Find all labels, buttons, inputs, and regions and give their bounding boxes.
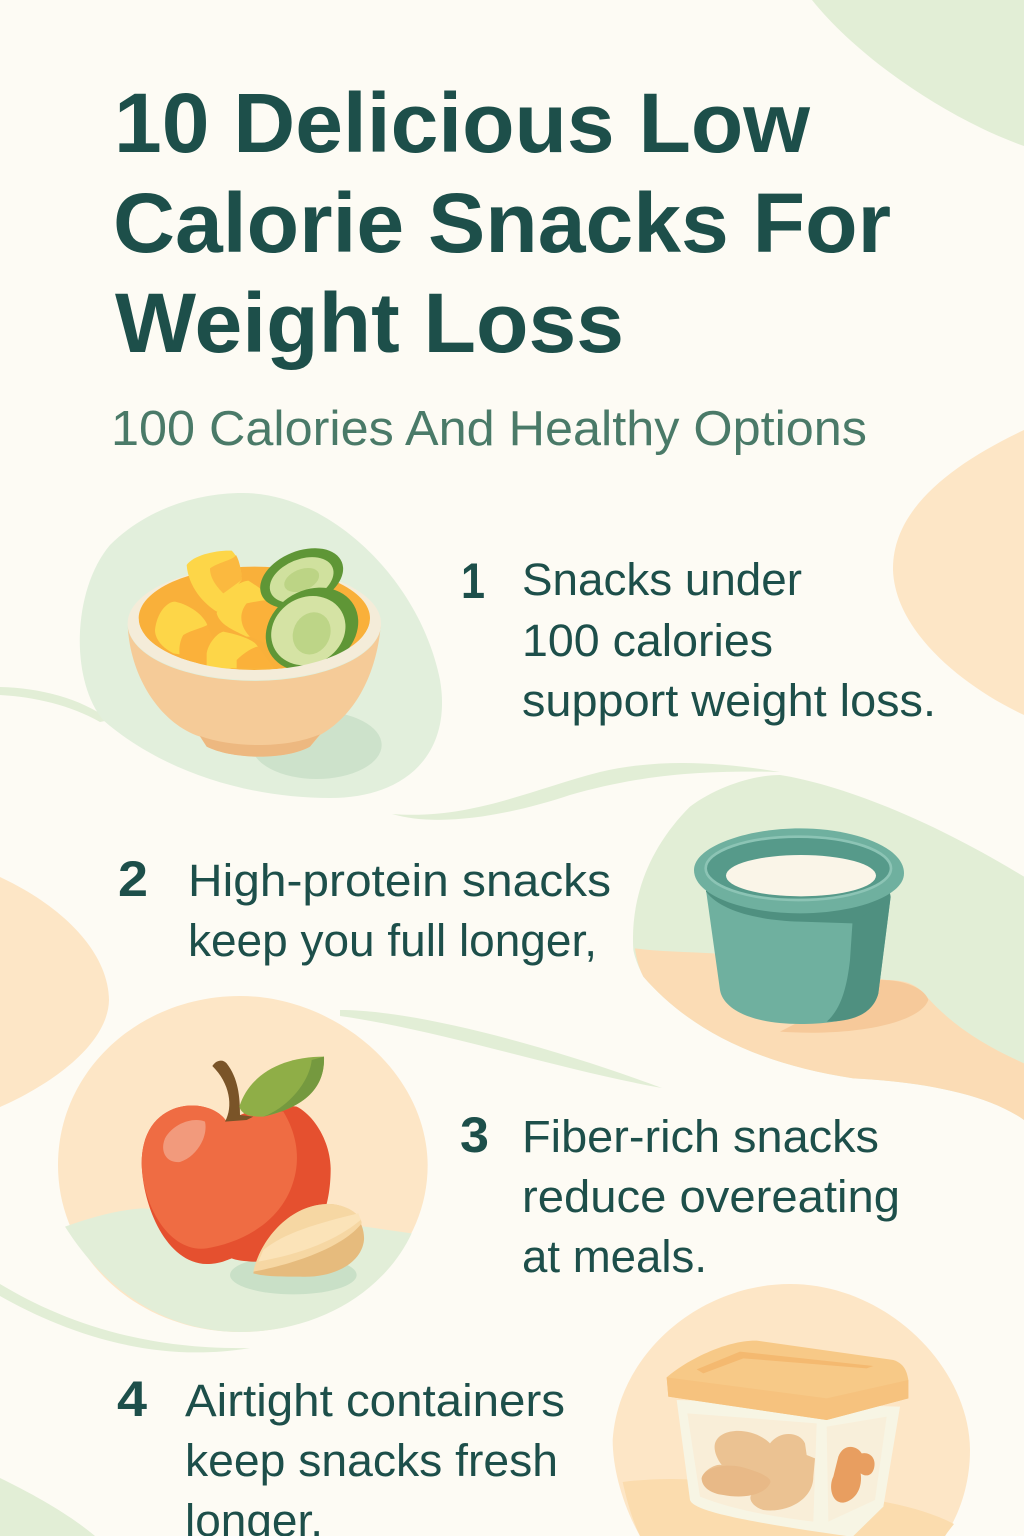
title: Calorie Snacks For	[113, 176, 891, 270]
text: snack 1: 100 calories	[522, 615, 773, 666]
text: snack 4	[117, 1371, 565, 1536]
title	[113, 76, 891, 370]
panel: snack 3 apple	[58, 996, 428, 1332]
panel: snack 1 bowl	[80, 493, 442, 798]
icon background	[58, 996, 428, 1332]
icon: airtight container	[667, 1341, 908, 1536]
icon background	[633, 775, 1024, 1120]
text: snack 3: 3	[460, 1107, 489, 1163]
text: snack 1	[461, 553, 936, 726]
icon: yogurt cup	[694, 828, 928, 1033]
title: 10 Delicious Low	[114, 76, 811, 170]
icon: apple and nut	[142, 1057, 364, 1294]
text: snack 3: at meals.	[522, 1231, 707, 1282]
text: snack 2: 2	[118, 851, 148, 907]
text: snack 2: keep you full longer,	[188, 915, 597, 966]
panel: snack 4 container	[613, 1284, 970, 1536]
icon background: green blob	[80, 493, 442, 798]
text: snack 2	[118, 851, 611, 966]
subtitle: 100 Calories And Healthy Options	[111, 402, 867, 456]
icon: bowl of fruit	[128, 537, 382, 779]
text: snack 3: reduce overeating	[522, 1171, 900, 1222]
text: snack 4: Airtight containers	[185, 1375, 565, 1426]
text: snack 1: 1	[461, 553, 485, 609]
text: snack 3	[460, 1107, 900, 1282]
text: snack 4: keep snacks fresh	[185, 1435, 558, 1486]
icon background	[613, 1284, 970, 1536]
text: snack 1: support weight loss.	[522, 675, 936, 726]
text: snack 3: Fiber-rich snacks	[522, 1111, 879, 1162]
text: snack 4: 4	[117, 1371, 147, 1427]
text: snack 2: High-protein snacks	[188, 855, 611, 906]
panel: snack 2 yogurt	[633, 775, 1024, 1120]
text: snack 1: Snacks under	[522, 554, 802, 605]
title: Weight Loss	[115, 276, 624, 370]
